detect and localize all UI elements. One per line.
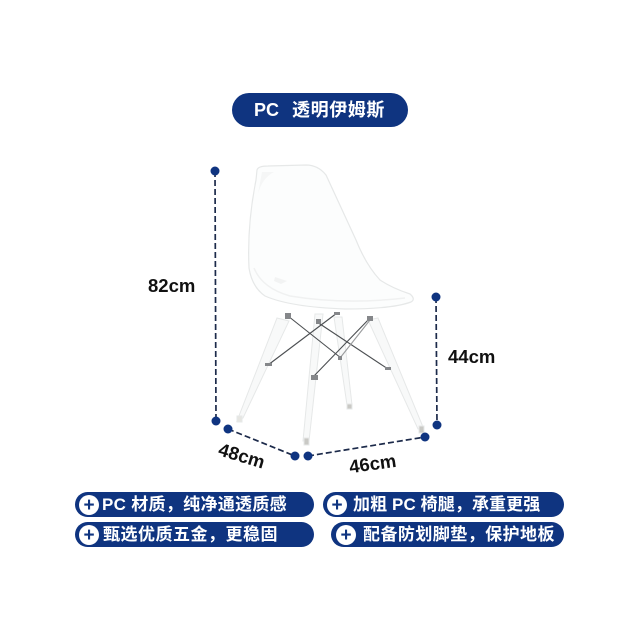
label: 48cm: 48cm xyxy=(216,439,268,472)
feature pill: floor pads: 配备防划脚垫，保护地板 xyxy=(363,525,555,544)
feature pill: hardware xyxy=(75,522,314,547)
label: 82cm: 82cm xyxy=(148,275,195,296)
seat height line 44cm xyxy=(432,292,442,430)
height line 82cm xyxy=(210,166,220,426)
width line 46cm xyxy=(304,432,430,460)
title pill: PC xyxy=(254,100,279,120)
title pill xyxy=(232,93,408,127)
feature pill: thick legs xyxy=(323,492,564,517)
feature pill: floor pads xyxy=(331,522,564,547)
feature pill: PC material: PC 材质，纯净通透质感 xyxy=(102,495,287,514)
feature pill: PC material xyxy=(75,492,314,517)
label: 46cm: 46cm xyxy=(348,450,397,477)
title pill: 透明伊姆斯 xyxy=(292,100,385,120)
label: 44cm: 44cm xyxy=(448,346,495,367)
icon: chair hardware xyxy=(265,312,391,380)
feature pill: hardware: 甄选优质五金，更稳固 xyxy=(103,525,278,544)
icon: chair legs xyxy=(237,314,424,445)
icon: chair shell xyxy=(249,165,413,309)
feature pill: thick legs: 加粗 PC 椅腿，承重更强 xyxy=(353,495,540,514)
depth line 48cm xyxy=(224,424,300,460)
icon: chair wires xyxy=(268,313,388,377)
